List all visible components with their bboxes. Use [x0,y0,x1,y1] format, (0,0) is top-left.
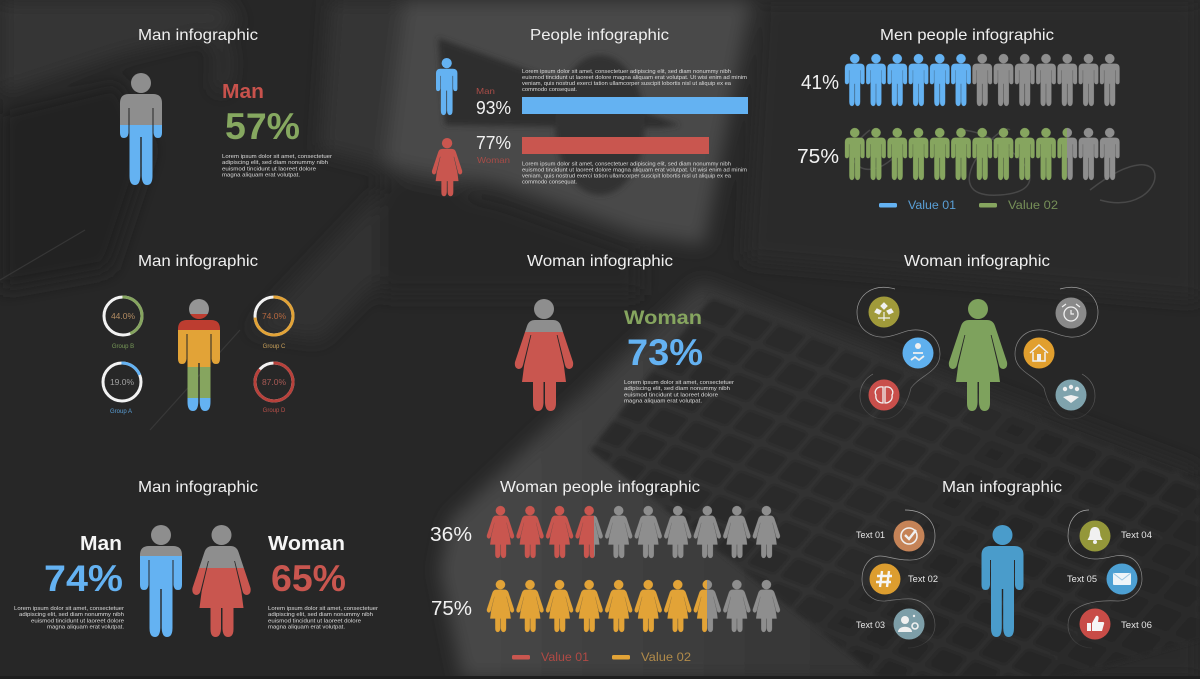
ring: group D: Group D [263,408,286,414]
woman text block: magna aliquam erat volutpat. [268,625,345,631]
woman bar [522,137,709,154]
upper text block: euismod tincidunt ut laoreet dolore magna aliquam erat volutpat. Ut wisi enim ad minim [522,75,747,81]
label 04: Text 04 [1121,530,1152,540]
pictogram row 2 [487,580,780,632]
text block: euismod tincidunt ut laoreet dolore [222,166,316,172]
left curve [857,287,940,419]
right curve [1015,287,1098,419]
text block: adipiscing elit, sed diam nonummy nibh [222,160,328,166]
woman text block: Lorem ipsum dolor sit amet, consectetuer [268,606,378,612]
text block [222,154,332,179]
woman figure [192,525,251,637]
heading: People infographic [530,27,669,44]
man text block: euismod tincidunt ut laoreet dolore [31,618,124,624]
man figure [140,525,182,637]
text block: adipiscing elit, sed diam nonummy nibh [624,386,730,392]
ring: group D: 87.0% [262,377,286,387]
icon: hashtag [870,564,900,594]
woman text block: adipiscing elit, sed diam nonummy nibh [268,612,373,618]
man value: 74% [44,558,123,599]
icon: alarm clock [1056,298,1086,328]
right curve [1068,510,1142,648]
icon: check badge [894,520,924,552]
ring: group A: Group A [110,409,132,415]
ring: group C [255,297,293,350]
lower text block: veniam, quis nostrud exerci tation ullamcorper suscipit lobortis nisl ut aliquip ex ea [522,174,732,180]
icon: brain [868,380,900,410]
ring: group B [104,297,142,350]
icon: person chart [902,338,934,368]
pictogram row 2 [845,128,1119,180]
value: 57% [225,106,300,147]
panel: woman 73% [515,253,734,411]
man bar [522,97,748,114]
label 01: Text 01 [856,530,885,540]
icon: person gear [894,608,924,640]
icon: team [1056,380,1086,410]
label 03: Text 03 [856,620,885,630]
man text block [14,606,124,631]
upper text block: Lorem ipsum dolor sit amet, consectetuer adipiscing elit, sed diam nonummy nibh [522,69,731,75]
pictogram row 1 [845,54,1119,106]
heading: Man infographic [138,479,258,496]
ring: group B: Group B [112,344,134,350]
legend: Value 01 [541,652,589,664]
heading: Man infographic [942,479,1062,496]
label 05: Text 05 [1067,574,1097,584]
value: 73% [627,332,703,373]
legend [512,652,691,664]
heading: Woman people infographic [500,479,700,496]
ring: group A [103,363,141,415]
heading: Woman infographic [527,253,673,270]
man figure [982,525,1024,637]
ring: group B: 44.0% [111,311,135,321]
man value: 93% [476,97,511,118]
woman value: 65% [271,558,346,599]
lower text block: commodo consequat. [522,180,577,186]
panel: women pictogram rows [430,479,780,664]
lower text block [522,162,747,186]
heading: Men people infographic [880,27,1054,44]
icon: man [436,58,457,115]
icon: envelope [1106,564,1138,594]
man text block: adipiscing elit, sed diam nonummy nibh [19,612,124,618]
legend: Value 01 [908,200,956,212]
text block [624,380,734,405]
heading: Woman infographic [904,253,1050,270]
man figure [120,73,162,185]
lower text block: Lorem ipsum dolor sit amet, consectetuer adipiscing elit, sed diam nonummy nibh [522,162,731,168]
woman text block: euismod tincidunt ut laoreet dolore [268,618,361,624]
man with colour bands [178,299,220,411]
text block: euismod tincidunt ut laoreet dolore [624,392,718,398]
ring: group D [255,363,293,414]
ring: group A: 19.0% [110,377,134,387]
left curve [862,510,935,648]
man label: Man [476,86,495,96]
icon: bell [1080,520,1110,552]
lower text block: euismod tincidunt ut laoreet dolore magna aliquam erat volutpat. Ut wisi enim ad minim [522,168,747,174]
panel: woman with icons [857,253,1098,419]
panel: men pictogram rows [797,27,1119,212]
woman label: Woman [268,533,345,555]
value 75%: 75% [431,598,472,620]
man text block: magna aliquam erat volutpat. [47,625,124,631]
woman value: 77% [476,132,511,153]
ring: group C: 74.0% [262,311,286,321]
legend: Value 02 [641,652,691,664]
text block: Lorem ipsum dolor sit amet, consectetuer [222,154,332,160]
ring: group C: Group C [263,344,286,350]
heading: Man infographic [138,253,258,270]
panel: man 57% [120,27,332,185]
icon: woman [432,138,462,196]
icon: thumbs up [1080,608,1110,640]
man label: Man [80,533,122,555]
legend: Value 02 [1008,200,1058,212]
panel: people bars [432,27,748,196]
text block: magna aliquam erat volutpat. [624,399,702,405]
label: Woman [624,308,702,329]
upper text block: veniam, quis nostrud exerci tation ullamcorper suscipit lobortis nisl ut aliquip ex ea [522,81,732,87]
value 41%: 41% [801,72,839,94]
upper text block [522,69,747,93]
text block: Lorem ipsum dolor sit amet, consectetuer [624,380,734,386]
man text block: Lorem ipsum dolor sit amet, consectetuer [14,606,124,612]
pictogram row 1 [487,506,780,558]
upper text block: commodo consequat. [522,87,577,93]
value 75%: 75% [797,146,839,168]
panel: man and woman comparison [14,479,378,637]
panel: man with group rings [103,253,293,415]
panel: man with labelled icons [856,479,1152,648]
label 06: Text 06 [1121,620,1152,630]
heading: Man infographic [138,27,258,44]
icon: flower [868,296,900,328]
woman figure [515,299,573,411]
label: Man [222,81,264,103]
value 36%: 36% [430,524,472,546]
icon: house [1024,338,1054,368]
label 02: Text 02 [908,574,938,584]
woman text block [268,606,378,631]
woman label: Woman [477,155,510,165]
woman figure [949,299,1007,411]
legend [879,200,1058,212]
text block: magna aliquam erat volutpat. [222,173,300,179]
